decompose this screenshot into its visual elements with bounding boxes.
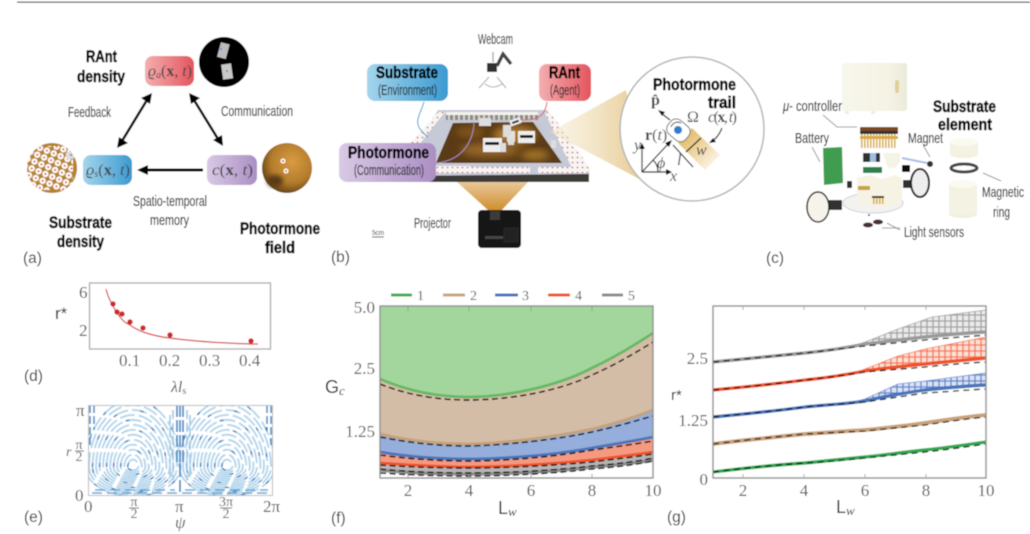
dashed theory lines [713,335,986,472]
leader lines [812,115,1001,230]
cone: magnification to trail [550,90,645,182]
trail heading: Photormone [653,75,736,94]
math labels [632,92,737,185]
fit curve [106,289,258,344]
substrate rings [949,138,978,218]
tick labels: 4 [465,481,474,500]
tick labels: 6 [79,283,88,302]
panel b: experimental setup [331,31,764,266]
label: spatio-temporal memory: Spatio-temporal [133,193,207,210]
tick labels: 6 [861,481,869,500]
filled stability regions [380,306,653,478]
tick labels: 0.1 [119,351,140,370]
math labels: w [696,142,707,159]
box: photormone field [207,155,257,185]
tick labels: 8 [922,481,930,500]
heading: substrate density [49,213,112,251]
box: RAnt density: a [156,70,161,81]
cone: projector beam [457,182,528,212]
tick labels: 4 [800,481,809,500]
heading: substrate element: element [938,115,992,134]
tick labels: 1.25 [678,411,708,430]
tick labels: π [130,495,138,510]
icon: black arena with robots [199,37,249,87]
tick labels: 0 [75,486,84,505]
tick labels: 6 [527,481,535,500]
axis titles [325,377,517,519]
tick labels: 0 [700,470,708,489]
tick labels: π [76,401,85,420]
tick labels: 0.4 [239,351,261,370]
trail heading: trail [708,93,736,112]
panel label e: (e) [24,509,43,526]
panel label g: (g) [667,509,686,526]
math labels: y [632,137,642,154]
tick labels: 1.25 [345,422,375,441]
heading: substrate element [933,97,996,134]
axis titles [671,387,855,518]
axis titles: G [325,377,339,397]
tick labels [678,349,994,500]
labels: Battery [795,130,829,147]
mean curves [713,332,986,472]
callout: photormone: Photormone [348,143,429,162]
callout: photormone [339,143,436,182]
heading: substrate density: Substrate [49,213,112,232]
label: spatio-temporal memory: memory [150,212,189,229]
robot [664,116,693,145]
tick labels: 0 [84,497,92,516]
electronics stack [860,127,900,173]
axis titles: λl [170,379,183,396]
icon: photormone disc [262,143,312,193]
labels: Light sensors [904,224,964,241]
inset: photormone trail [620,57,764,201]
legend: 4 [575,289,582,304]
legend: 5 [628,289,635,304]
tick labels: 2 [79,321,88,340]
labels: μ- controller [782,98,842,115]
panel label c: (c) [766,250,784,267]
streamlines [85,400,275,496]
box: substrate density: ( [98,162,104,179]
math labels: r(t) [645,127,667,144]
tick labels: 2π [263,497,280,516]
callout: RAnt [539,63,591,101]
callout: substrate: (Environment) [378,82,437,99]
legend: 3 [522,289,529,304]
dashed theory lines [380,342,653,476]
axis titles: r* [671,387,682,404]
tick labels: 2 [222,507,230,522]
axis titles: c [339,383,345,398]
tick labels [345,298,662,500]
data points [110,301,254,344]
heading: photormone field [240,219,320,257]
light sensors [863,214,883,228]
trail heading [653,75,736,112]
label: projector: Projector [414,215,451,232]
heading: RAnt density: density [77,67,125,86]
callout: substrate [367,63,448,101]
box: substrate density: s [94,169,98,180]
heading: photormone field: field [265,238,295,257]
panel label d: (d) [24,368,43,385]
tick labels: 2 [739,481,747,500]
axis titles: L [498,498,508,518]
heading: RAnt density [77,47,125,86]
callout: substrate: Substrate [376,63,438,82]
labels: ring [993,204,1010,221]
label: Communication: Communication [221,103,293,120]
callout: RAnt: (Agent) [550,82,580,99]
icon: projector [478,210,521,248]
heading: substrate density: density [57,232,104,251]
box: RAnt density: x, t) [166,63,192,80]
axis titles: w [846,503,855,518]
box: substrate density: ϱ [86,162,94,179]
tick labels: r [66,445,72,460]
tick labels [66,401,280,532]
panel a: feedback triangle [23,37,320,267]
math labels: x [669,168,677,185]
axis titles: L [836,497,846,517]
arrows between the boxes [117,93,223,175]
heading: photormone field: Photormone [240,219,320,238]
tick labels [79,283,261,370]
math labels: l [677,152,682,169]
panel label a: (a) [23,250,42,267]
math labels: p̂ [651,92,660,109]
trail [678,128,720,170]
axis titles [55,304,186,397]
tick labels: 10 [644,481,662,500]
tick labels: 2 [130,507,138,522]
heading: substrate element: Substrate [933,97,996,116]
tick labels: π [175,497,184,516]
tick labels: 8 [588,481,596,500]
legend: 1 [417,289,424,304]
panel label f: (f) [331,510,346,527]
tick labels: 5.0 [354,298,375,317]
panel label b: (b) [331,249,350,266]
arena platform [398,110,590,182]
tick labels: π [75,438,83,453]
boundary lines [380,333,653,474]
label: webcam: Webcam [478,31,513,48]
axis titles: r* [55,304,68,323]
labels [782,98,1024,241]
box: RAnt density [145,56,194,86]
callout: photormone: (Communication) [354,162,424,179]
math labels: Ω [687,109,699,126]
labels: Magnet [908,130,944,147]
panel f: phase diagram [325,289,662,527]
panel d: r star versus lambda ls [24,283,270,397]
box: substrate density: x, t) [104,162,130,179]
label: spatio-temporal memory [133,193,207,229]
math labels: c(x, t) [708,109,737,126]
callout: RAnt: RAnt [549,63,580,82]
icon: substrate disc [27,143,77,193]
box: RAnt density: ϱ [148,63,156,80]
tick labels: 2 [404,481,412,500]
tick labels: 2.5 [354,359,375,378]
coordinate axes and vectors [639,110,722,175]
scale bar: 5cm [372,230,384,237]
panel g: radius versus width [667,306,994,526]
legend: 2 [470,289,477,304]
box: substrate density [83,155,132,185]
tick labels: 3π [219,495,233,510]
robot case [842,63,907,114]
tick labels: 0.2 [159,351,180,370]
panel c: substrate element exploded view [766,63,1024,267]
battery [823,147,843,185]
chassis and wheels [807,158,933,222]
label: Feedback: Feedback [68,104,111,121]
box: RAnt density: ( [161,63,166,80]
heading: RAnt density: RAnt [86,47,117,66]
axis titles: w [508,504,517,519]
icon: webcam [479,52,511,88]
legend [391,289,635,304]
tick labels: 2.5 [687,349,708,368]
tick labels: 2 [76,450,82,465]
connector lines [418,102,547,163]
tick labels: 10 [978,481,994,500]
panel e: streamline plot [24,400,280,532]
error bands [845,310,986,405]
tick labels: ψ [175,513,186,532]
axis titles: s [182,386,186,397]
math labels: ϕ [657,155,665,172]
tick labels: 0.3 [199,351,220,370]
box: photormone field: c(x, t) [212,162,253,179]
